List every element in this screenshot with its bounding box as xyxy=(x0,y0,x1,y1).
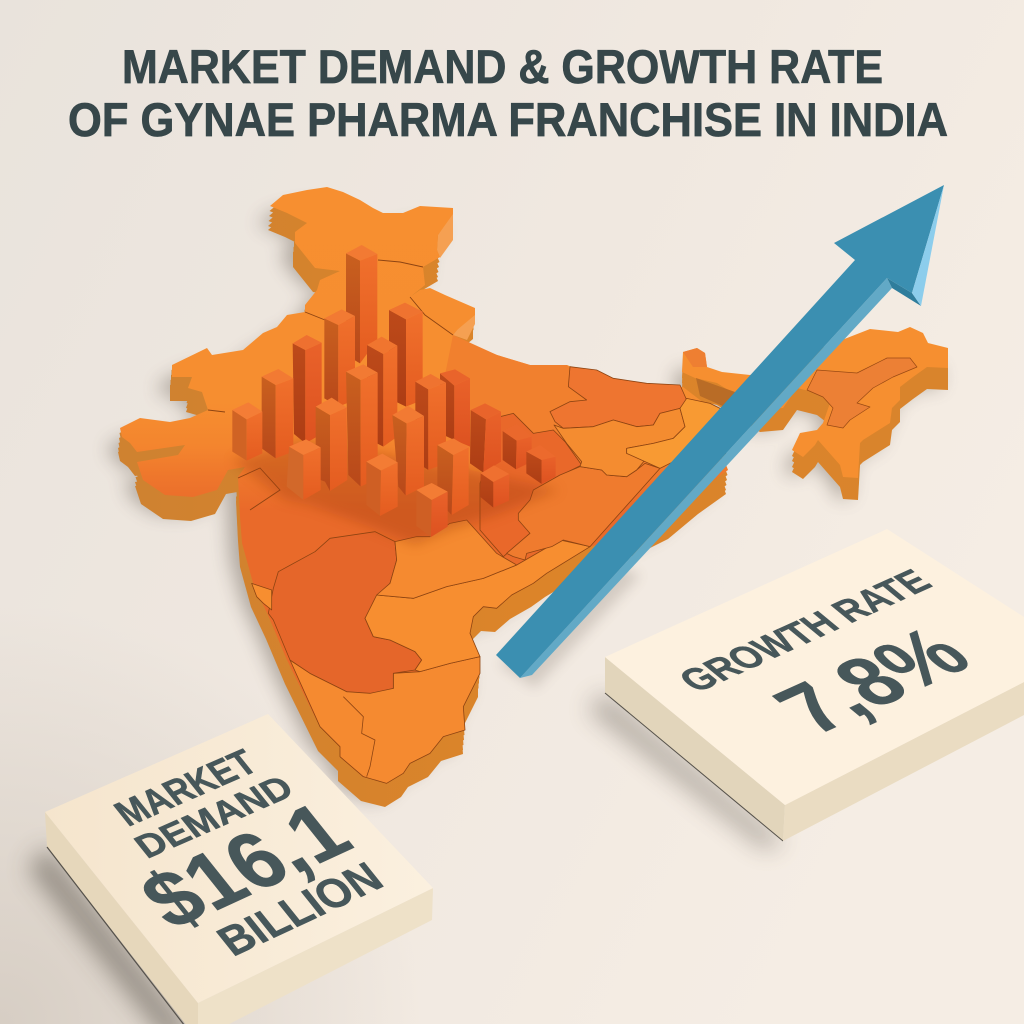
bar 8 xyxy=(262,369,293,458)
arrow top face xyxy=(496,185,944,678)
bar chart shadow xyxy=(232,440,560,545)
map shadow xyxy=(108,205,940,801)
card top face xyxy=(45,714,433,1003)
bar 1 xyxy=(346,245,377,363)
map top surface: mainland xyxy=(120,187,728,783)
north-east states xyxy=(683,348,917,428)
bar 7 xyxy=(293,335,322,443)
title: OF GYNAE PHARMA FRANCHISE IN INDIA xyxy=(68,93,948,146)
state: central region xyxy=(377,520,517,598)
bar 2 xyxy=(389,303,423,407)
card left face xyxy=(605,657,785,841)
bar 9 xyxy=(232,402,262,461)
bar 17 xyxy=(287,439,321,500)
state: Odisha region xyxy=(507,463,660,560)
arrow shadow xyxy=(500,560,640,688)
card text: MARKET xyxy=(107,743,266,834)
card text xyxy=(107,743,392,965)
card text: GROWTH RATE xyxy=(670,563,941,699)
state: Maharashtra region xyxy=(268,532,422,693)
card top face xyxy=(605,529,1024,805)
card: market demand xyxy=(28,714,433,1024)
card: growth rate xyxy=(588,529,1024,850)
bar 20 xyxy=(416,483,448,537)
map extruded side xyxy=(118,192,948,807)
map of India xyxy=(108,187,948,807)
card shadow xyxy=(28,847,198,1024)
bar chart on map xyxy=(232,245,556,537)
card shadow xyxy=(588,693,783,850)
map top surface: north-east xyxy=(682,327,948,478)
lit side faces in the north xyxy=(437,212,475,340)
bar 4 xyxy=(367,337,397,447)
card text: DEMAND xyxy=(126,768,301,865)
title: MARKET DEMAND & GROWTH RATE xyxy=(122,40,883,93)
card right face xyxy=(783,682,1024,841)
card text: 7,8% xyxy=(754,613,990,748)
bar 3 xyxy=(324,309,355,407)
card bottom edge line xyxy=(47,847,188,1024)
bar 12 xyxy=(316,398,347,491)
card right face xyxy=(198,888,433,1024)
arrow shaft side xyxy=(520,278,892,678)
title xyxy=(68,40,948,146)
eastern states (coordinates from a 3x crop) xyxy=(480,367,727,560)
bar 14 xyxy=(503,424,532,469)
bar 5 xyxy=(440,369,470,447)
bar 6 xyxy=(415,374,446,470)
bar 10 xyxy=(470,403,501,473)
southern states (coordinates from a 3x crop) xyxy=(252,520,590,783)
state: Bengal xyxy=(627,398,727,468)
state: Jharkhand region xyxy=(480,413,582,557)
card left face xyxy=(45,812,198,1024)
bar 16 xyxy=(526,445,556,484)
card text: BILLION xyxy=(208,853,392,965)
central-north tint xyxy=(440,335,600,480)
state: south-west xyxy=(290,657,480,783)
state: Telangana and Andhra region xyxy=(365,540,590,672)
card bottom edge line xyxy=(605,693,783,841)
bar 19 xyxy=(480,465,509,508)
Bengal notch side xyxy=(696,378,735,408)
bar 13 xyxy=(392,406,424,496)
card text xyxy=(670,563,990,748)
bar 15 xyxy=(437,438,469,515)
state: Bihar region xyxy=(550,367,687,428)
state: central-east xyxy=(554,408,685,477)
card text: $16,1 xyxy=(123,785,368,946)
border: southern divide xyxy=(343,697,375,777)
growth arrow xyxy=(496,185,944,688)
state: Goa xyxy=(252,583,272,610)
bar 18 xyxy=(366,454,398,516)
north state borders xyxy=(208,260,453,510)
bar 11 xyxy=(346,364,378,487)
arrow head underside xyxy=(887,278,921,306)
arrow head lit face xyxy=(912,185,944,306)
